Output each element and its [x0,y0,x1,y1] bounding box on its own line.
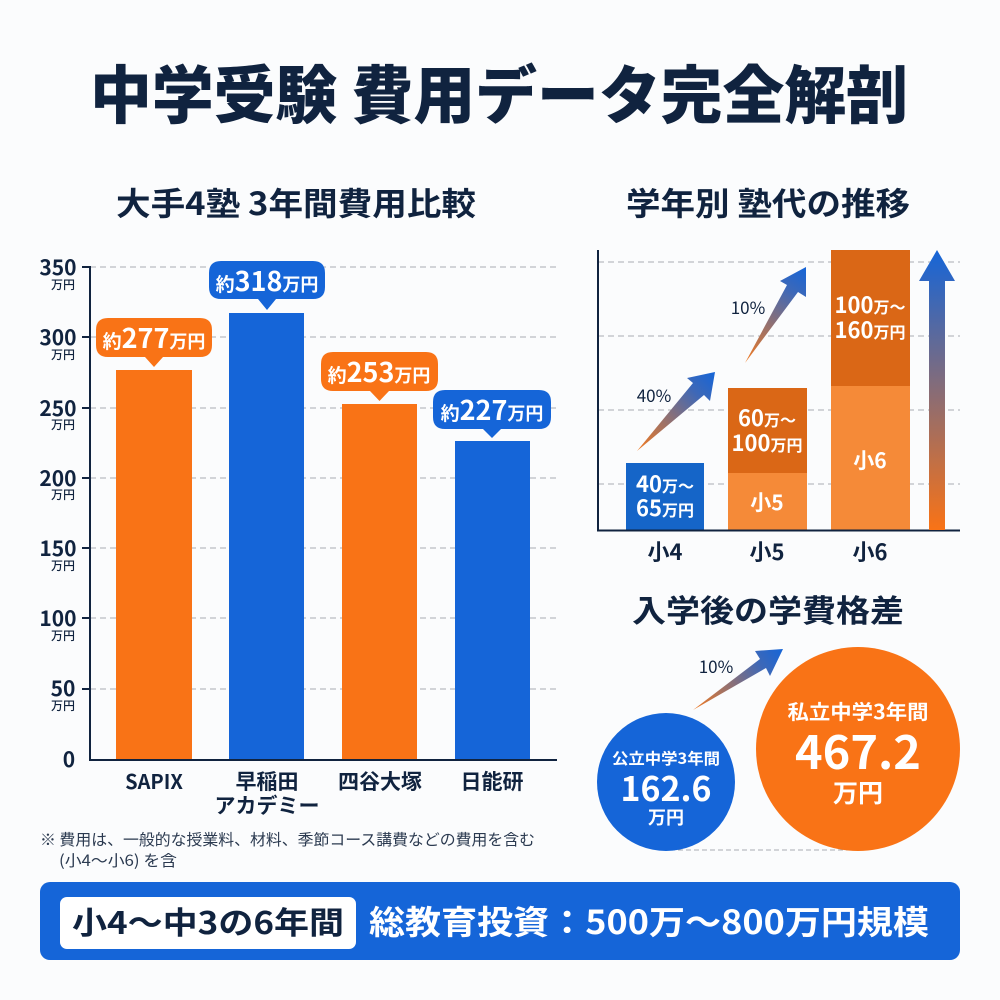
bar: grade 6: 小6 [853,445,887,475]
callout: Nichinoken value: 約227万円 [441,389,543,428]
bar chart: three year costs [39,252,557,820]
comparison: public vs private [597,647,960,851]
stacked bar chart: fees by grade [598,250,960,567]
y axis labels: 200 [39,463,77,493]
category labels: 四谷大塚 [338,766,422,796]
y axis [82,267,557,760]
y axis labels: 350 [39,252,77,282]
bar: grade 4: 65万円 [636,491,694,523]
y axis labels: 万円 [51,697,75,714]
bar: grade 4 [626,463,704,530]
label: 10 percent: 10% [731,294,765,319]
arrow: grade 4 to 5 [637,372,715,451]
callout: SAPIX value: 約277万円 [103,317,205,356]
footnote: (小4～小6) を含 [59,849,177,871]
grade labels [648,535,888,567]
callout: Yotsuya value: 約253万円 [328,351,430,390]
bar: grade 5: 60万～ [738,401,796,433]
grade labels: 小4 [648,535,683,567]
callout: Nichinoken value [433,389,551,438]
y axis labels: 万円 [51,486,75,503]
y axis labels: 0 [63,744,75,774]
label: 40 percent: 40% [637,382,671,407]
bar: grade 5: 小5 [750,487,784,517]
bar: grade 5 [728,388,807,530]
y axis labels: 250 [39,393,77,423]
arrow: grade 5 to 6 [745,267,806,363]
y axis labels: 万円 [51,276,75,293]
circle: public junior high: 162.6 [620,762,712,811]
grade labels: 小6 [853,535,888,567]
heading: big four cram school comparison: 大手4塾 3年間費用比較 [116,179,476,225]
bar: Nichinoken [455,441,530,759]
y axis labels: 万円 [51,416,75,433]
y axis labels [39,252,77,774]
circle: private junior high: 467.2 [795,717,921,783]
callout: Waseda value: 約318万円 [216,260,318,299]
arrow: public to private [693,649,783,710]
y axis labels: 50 [51,673,75,703]
category labels: 早稲田 [236,766,298,796]
bar: grade 6: 160万円 [835,313,905,345]
category labels [125,766,524,820]
y axis labels: 万円 [51,346,75,363]
bar: SAPIX [116,370,192,759]
bar: grade 4: 40万～ [636,467,694,499]
y axis labels: 150 [39,533,77,563]
callout: Yotsuya value [321,351,438,401]
bar: grade 5: 100万円 [732,426,802,458]
bar: grade 6: 100万～ [835,288,905,320]
y axis labels: 万円 [51,557,75,574]
heading: tuition gap after enrollment: 入学後の学費格差 [632,586,904,631]
circle: private junior high: 私立中学3年間 [788,696,928,725]
title: 中学受験 費用データ完全解剖 [90,46,908,137]
banner: total education investment [40,882,960,960]
circle: private junior high: 万円 [833,774,883,810]
footnote: ※ 費用は、一般的な授業料、材料、季節コース講費などの費用を含む [40,828,535,850]
axes [598,250,960,530]
circle: private junior high [756,647,960,851]
bar: Yotsuya Otsuka [342,404,417,759]
circle: public junior high: 公立中学3年間 [612,747,720,769]
bar: Waseda Academy [229,313,304,759]
circle: public junior high: 万円 [648,804,684,830]
heading: fees by grade: 学年別 塾代の推移 [626,179,910,225]
bar: grade 6 [831,250,910,530]
y axis labels: 100 [39,603,77,633]
category labels: 日能研 [460,766,524,796]
footnote [40,828,535,871]
callout: Waseda value [209,260,325,310]
category labels: SAPIX [125,766,183,795]
y axis labels: 300 [39,322,77,352]
callout: SAPIX value [96,317,212,367]
banner label pill: 小4～中3の6年間 [72,898,344,943]
label: 10 percent: 10% [699,653,733,678]
grade labels: 小5 [750,535,784,567]
banner text: 総教育投資：500万～800万円規模 [369,896,929,944]
category labels: アカデミー [214,790,320,820]
circle: public junior high [597,713,735,851]
y axis labels: 万円 [51,627,75,644]
arrow: upward trend [919,250,955,530]
